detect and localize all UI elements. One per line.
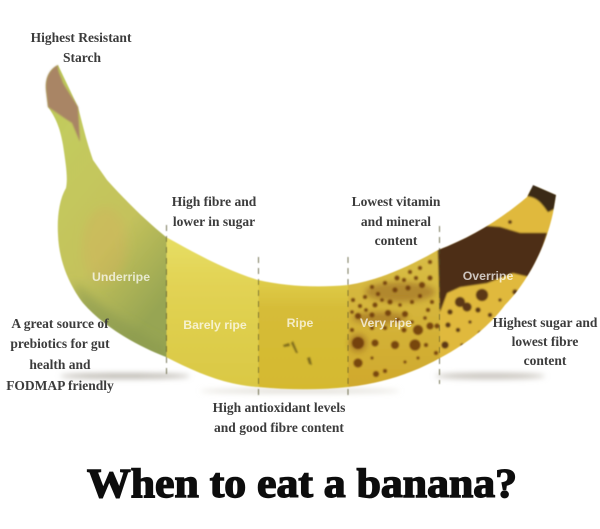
ground shadow	[60, 373, 545, 393]
barely ripe section	[166, 237, 260, 388]
note: underripe left: health and	[29, 357, 91, 372]
note: barely ripe: High fibre and	[172, 194, 257, 209]
section labels: Very ripe	[360, 316, 412, 330]
ripe section	[258, 280, 349, 390]
note: ripe: High antioxidant levels	[213, 400, 345, 415]
note: ripe: and good fibre content	[214, 420, 344, 435]
section labels: Ripe	[287, 316, 313, 330]
section labels	[92, 269, 513, 332]
note: underripe top: Highest Resistant	[31, 30, 132, 45]
note: underripe left: FODMAP friendly	[6, 378, 114, 393]
section labels: Underripe	[92, 270, 150, 284]
underripe section	[45, 64, 168, 358]
note: underripe left	[6, 316, 114, 393]
title: When to eat a banana?	[87, 460, 517, 506]
note: overripe: Highest sugar and	[493, 315, 598, 330]
banana	[30, 50, 560, 400]
note: underripe left: A great source of	[11, 316, 109, 331]
section dividers	[166, 225, 440, 400]
section labels: Overripe	[463, 269, 513, 283]
note: underripe top: Starch	[63, 50, 101, 65]
note: overripe	[493, 315, 598, 368]
note: very ripe: content	[375, 233, 418, 248]
note: overripe: lowest fibre	[512, 334, 578, 349]
note: underripe left: prebiotics for gut	[10, 336, 110, 351]
overripe section	[439, 186, 556, 358]
note: overripe: content	[524, 353, 567, 368]
note: barely ripe	[172, 194, 257, 229]
section labels: Barely ripe	[183, 318, 247, 332]
stem tip	[46, 65, 80, 142]
note: ripe	[213, 400, 345, 435]
note: barely ripe: lower in sugar	[173, 214, 255, 229]
note: underripe top	[31, 30, 132, 65]
note: very ripe: and mineral	[361, 214, 431, 229]
very ripe section	[347, 249, 441, 388]
note: very ripe	[352, 194, 441, 248]
note: very ripe: Lowest vitamin	[352, 194, 441, 209]
